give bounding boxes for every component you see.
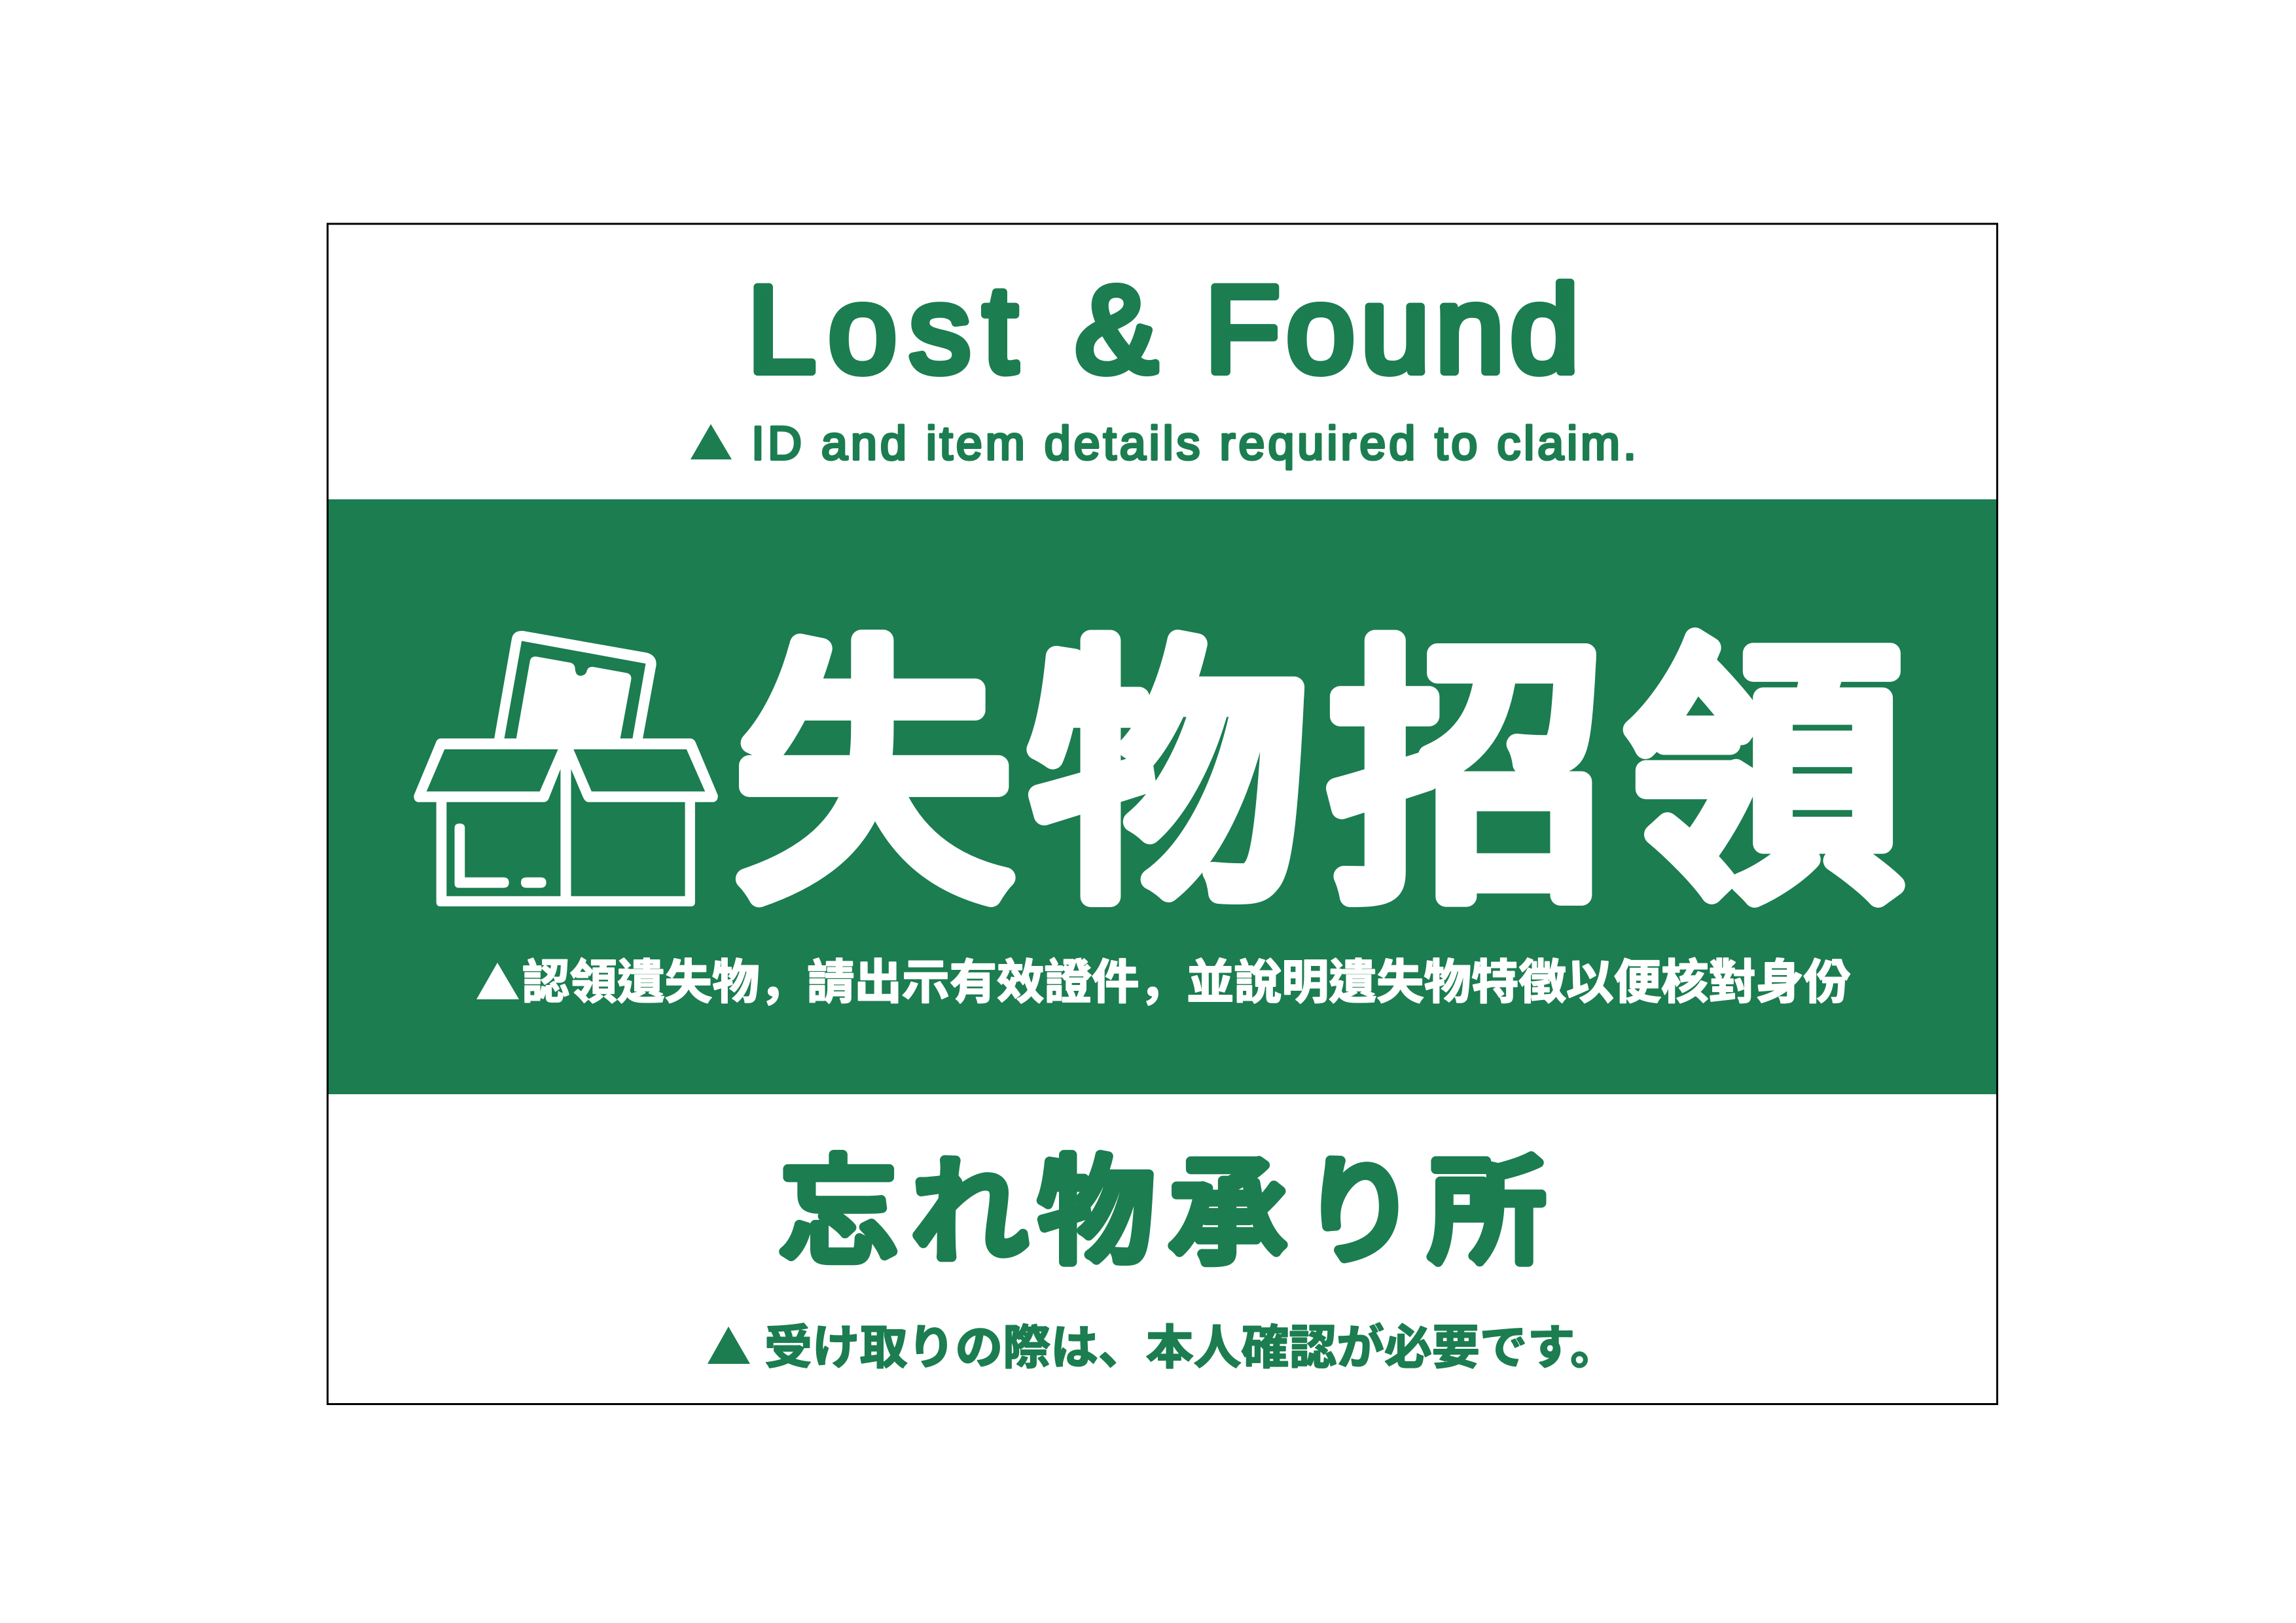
heading: Japanese title: 忘れ物承り所 <box>780 1147 1545 1277</box>
heading: English title: Found <box>1205 260 1585 398</box>
icon part: box corner mark <box>455 823 509 888</box>
icon: warning triangle Chinese <box>476 963 519 999</box>
text: Japanese note: 受け取りの際は、本人確認が必要です。 <box>764 1322 1618 1374</box>
panel: sign frame <box>327 224 1998 1404</box>
icon part: tablet frame <box>494 631 656 739</box>
heading: English title: & <box>1075 260 1157 398</box>
icon part: tablet screen <box>516 656 631 739</box>
heading: Chinese title: 失物招領 <box>734 622 1903 934</box>
icon: open box with tablet <box>414 631 718 906</box>
icon part: box dash mark <box>521 878 547 888</box>
icon: warning triangle English <box>691 424 732 459</box>
heading: English title: Lost <box>747 260 1030 398</box>
icon part: box outline <box>414 738 718 906</box>
icon: warning triangle Japanese <box>708 1327 750 1364</box>
text: Chinese note: 認領遺失物，請出示有效證件，並說明遺失物特徵以便核對身份 <box>522 944 1851 1012</box>
panel: green band <box>329 499 1996 1094</box>
text: English note: ID and item details required to claim. <box>751 418 1636 470</box>
